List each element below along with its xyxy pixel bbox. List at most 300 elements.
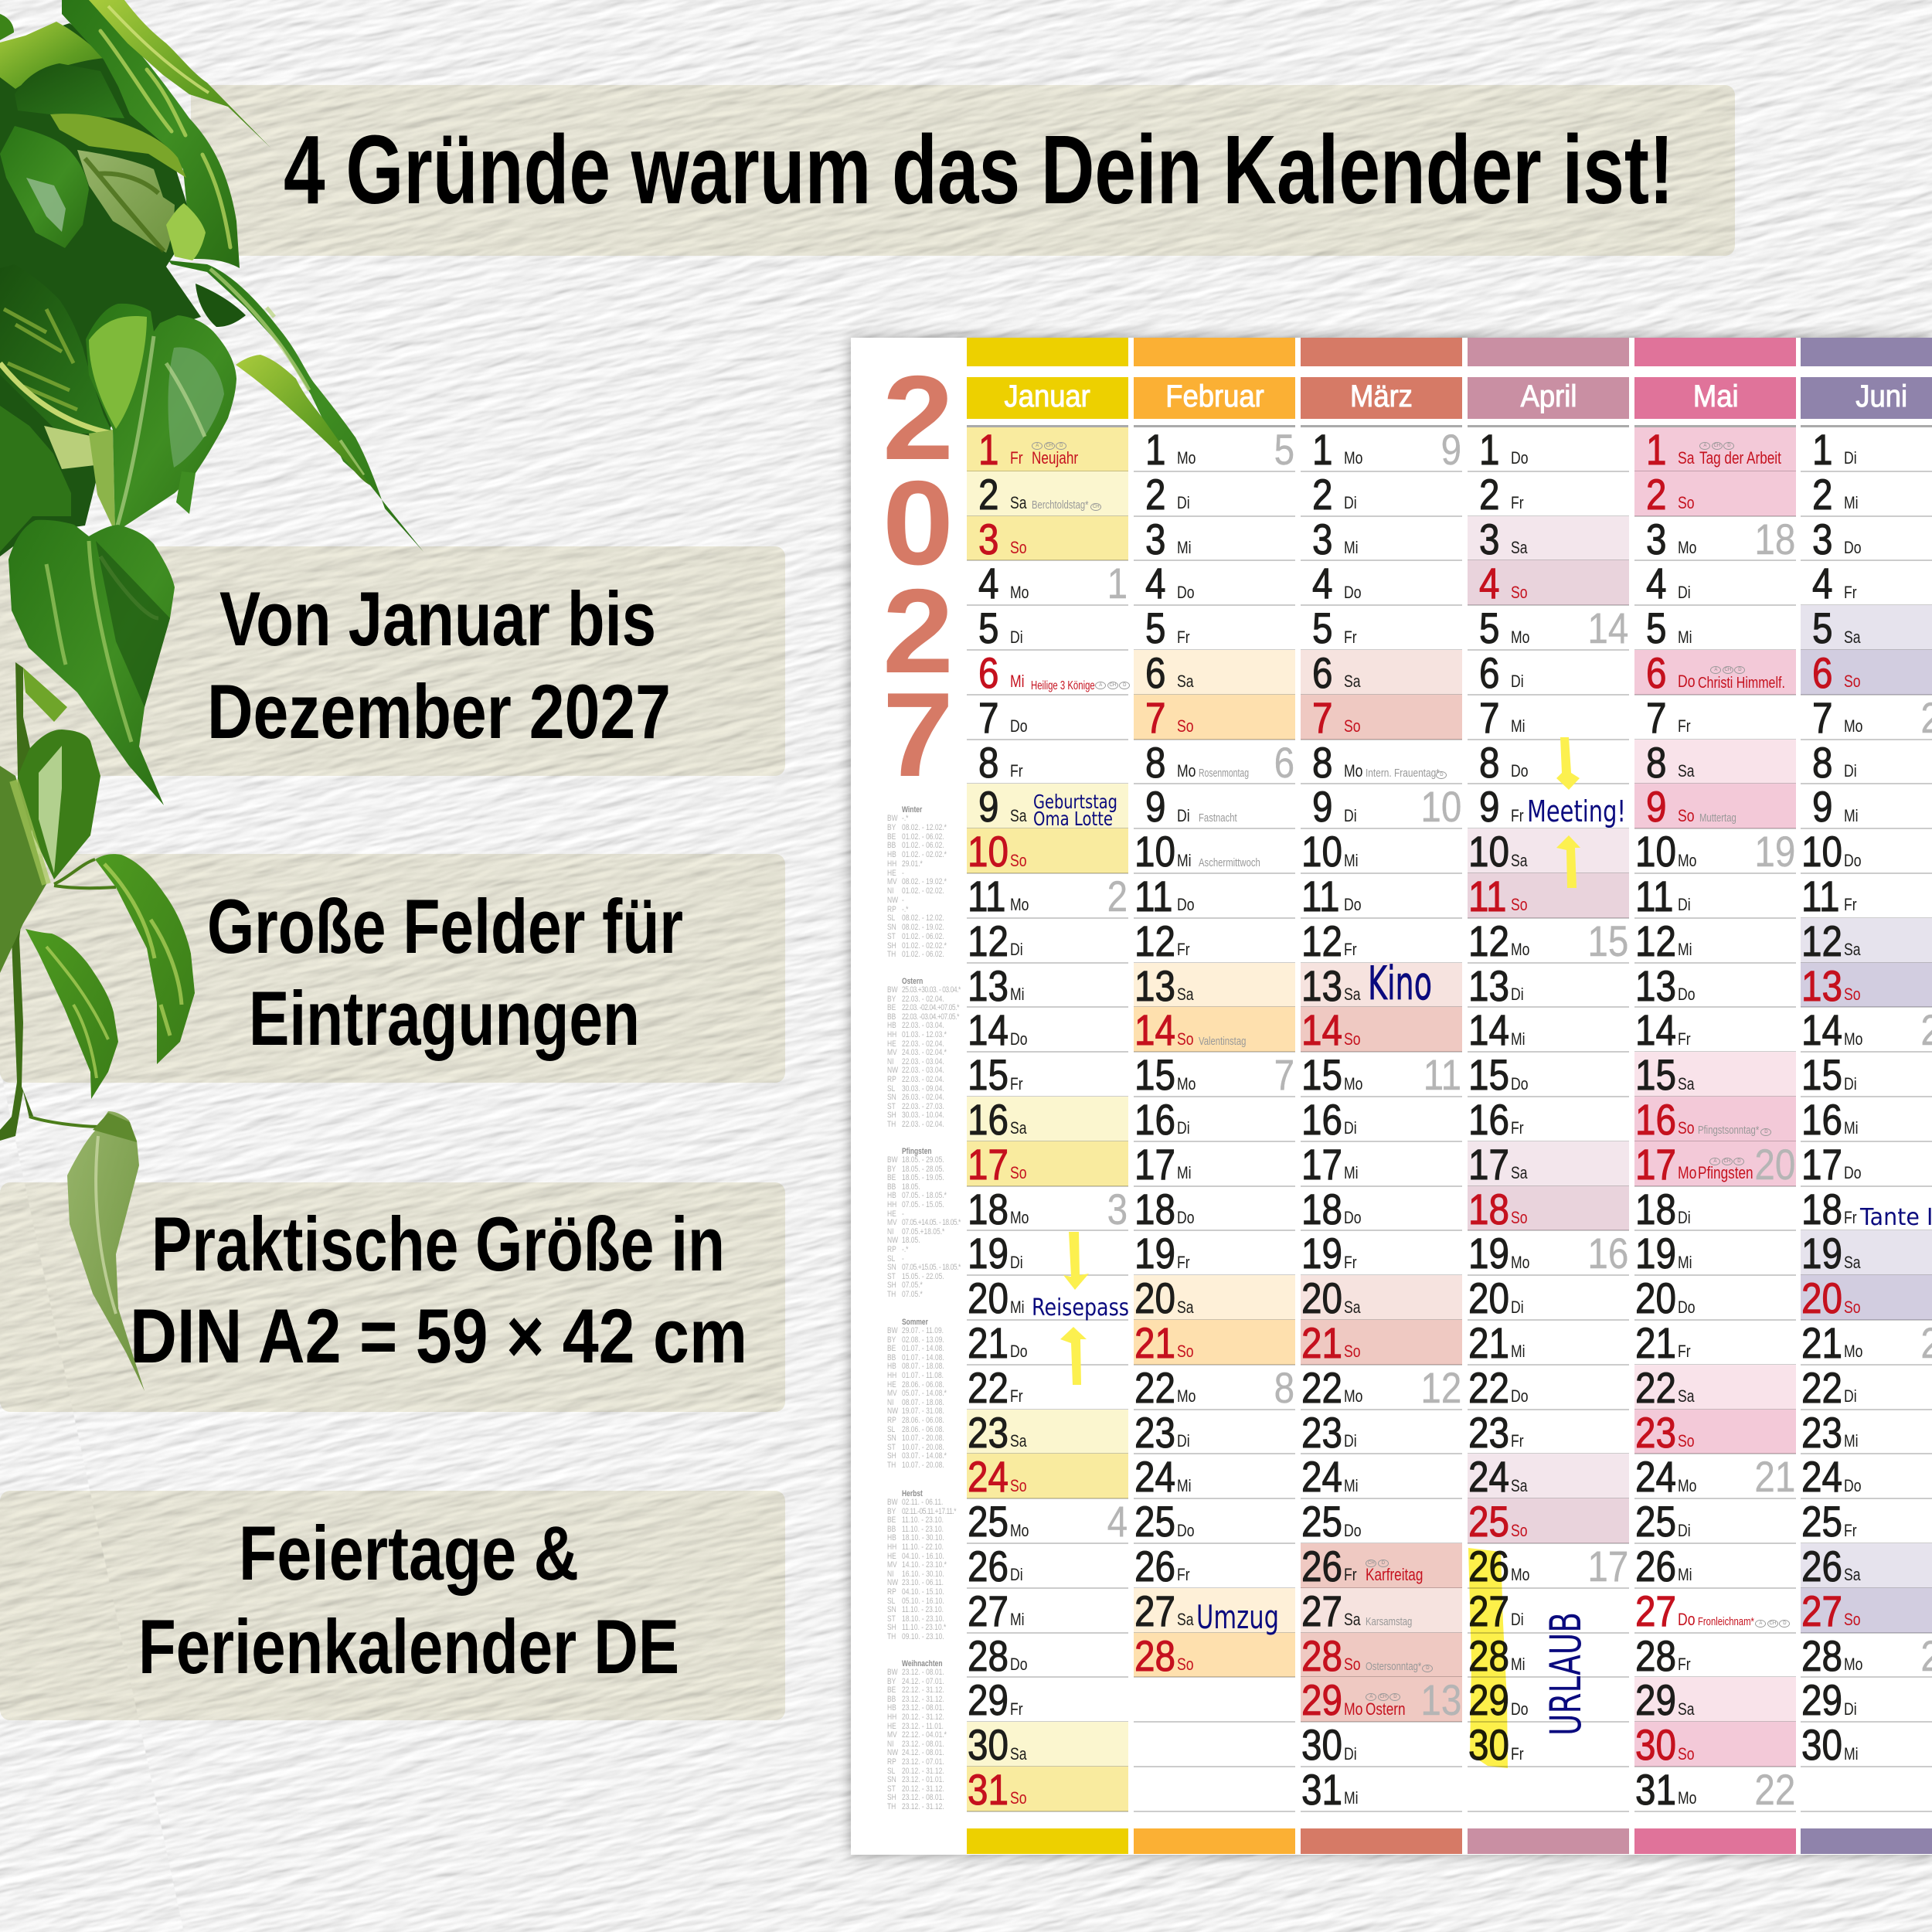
day rows März: Mo <box>1344 1074 1362 1094</box>
arrow: down to Reisepass <box>1063 1232 1089 1290</box>
day rows Mai: Do <box>1678 672 1695 691</box>
day rows Mai: 17 <box>1635 1140 1676 1189</box>
day rows Mai: D <box>1764 1130 1768 1134</box>
school holidays: Winter: - <box>902 869 904 878</box>
school holidays: Herbst: 02.11.-05.11.+17.11.* <box>902 1507 956 1516</box>
day rows März: 24 <box>1301 1452 1342 1501</box>
school holidays: Sommer: 01.07. - 14.08. <box>902 1353 944 1362</box>
school holidays: Winter: BW <box>887 814 898 823</box>
school holidays: Herbst: 11.10. - 23.10. <box>902 1515 944 1525</box>
school holidays: Herbst: 11.10. - 23.10. <box>902 1525 944 1534</box>
note: Kino: Kino <box>1368 957 1432 1011</box>
day rows April: So <box>1511 583 1527 602</box>
day rows Januar: 2 <box>1107 872 1128 920</box>
school holidays: Herbst: NI <box>887 1570 893 1579</box>
day rows Mai: Fr <box>1678 1029 1691 1049</box>
day rows März: So <box>1344 1655 1360 1674</box>
day rows März: Fr <box>1344 1253 1357 1272</box>
day rows Mai: Mi <box>1678 1253 1692 1272</box>
school holidays: Herbst: 05.10. - 16.10. <box>902 1597 944 1606</box>
day rows Mai: 9 <box>1646 782 1667 831</box>
school holidays: Ostern: 26.03. - 02.04. <box>902 1093 944 1102</box>
day rows März: 12 <box>1420 1363 1461 1412</box>
school holidays: Weihnachten: 23.12. - 08.01. <box>902 1793 944 1802</box>
day rows Januar: Di <box>1010 940 1022 959</box>
school holidays: Herbst <box>887 1489 957 1641</box>
plant: stem and lower hanging leaves <box>0 662 195 1391</box>
day rows Mai: So <box>1678 1431 1694 1451</box>
day rows Mai: 14 <box>1635 1005 1676 1054</box>
day rows Mai: CH <box>1770 1621 1776 1626</box>
note: Meeting!: Meeting! <box>1527 794 1626 828</box>
school holidays: Pfingsten: HB <box>887 1191 896 1200</box>
day rows April: 16 <box>1587 1229 1628 1277</box>
day rows Mai: 15 <box>1635 1050 1676 1099</box>
school holidays: Weihnachten: 23.12. - 01.01. <box>902 1775 944 1784</box>
day rows Mai: D <box>1727 444 1731 448</box>
school holidays: Herbst: HH <box>887 1543 896 1552</box>
arrow: up to Meeting <box>1556 835 1580 888</box>
day rows Januar: 6 <box>978 648 999 697</box>
day rows Juni <box>1801 427 1932 1811</box>
day rows April: Mi <box>1511 1342 1525 1361</box>
day rows März: 9 <box>1441 425 1461 474</box>
school holidays: Pfingsten: 07.05. - 15.05. <box>902 1200 944 1209</box>
school holidays: Winter: SL <box>887 913 895 923</box>
school holidays: Pfingsten: 18.05. <box>902 1236 920 1245</box>
day rows März: 9 <box>1312 782 1333 831</box>
school holidays: Ostern: NI <box>887 1057 893 1066</box>
day rows März: Sa <box>1344 672 1360 691</box>
school holidays: Pfingsten: Pfingsten <box>902 1147 932 1156</box>
day rows März: Mi <box>1344 538 1358 557</box>
day rows Januar: A <box>1036 444 1039 448</box>
day rows April: So <box>1511 895 1527 914</box>
day rows April: Di <box>1511 985 1524 1004</box>
day rows Februar: Mo <box>1177 448 1196 468</box>
day rows Juni: So <box>1844 985 1860 1004</box>
day rows Mai: D <box>1738 668 1742 672</box>
day rows Juni: 13 <box>1801 961 1842 1010</box>
day rows März: 31 <box>1301 1765 1342 1814</box>
day rows Februar: 7 <box>1145 693 1166 742</box>
day rows Mai: 23 <box>1635 1408 1676 1457</box>
day rows Januar: Neujahr <box>1032 448 1078 468</box>
day rows Juni: Di <box>1844 448 1857 468</box>
day rows Mai: 22 <box>1635 1363 1676 1412</box>
school holidays: Sommer: 28.06. - 06.08. <box>902 1416 944 1425</box>
day rows Mai: 5 <box>1646 604 1667 652</box>
day rows Mai: 20 <box>1754 1140 1795 1189</box>
day rows Juni: Do <box>1844 538 1861 557</box>
school holidays: Pfingsten: MV <box>887 1218 897 1227</box>
day rows Januar: 12 <box>968 917 1009 965</box>
day rows Juni: Di <box>1844 1074 1857 1094</box>
school holidays: Herbst: RP <box>887 1587 896 1597</box>
school holidays: Ostern: 22.03. -02.04.+07.05.* <box>902 1003 959 1012</box>
school holidays: Winter: 08.02. - 12.02. <box>902 913 944 923</box>
school holidays: Ostern: SL <box>887 1084 895 1094</box>
day rows Juni: 15 <box>1801 1050 1842 1099</box>
day rows Januar: 17 <box>968 1140 1009 1189</box>
day rows Januar: 2 <box>978 470 999 519</box>
school holidays: Herbst: 18.10. - 23.10. <box>902 1614 944 1624</box>
day rows April: So <box>1511 1521 1527 1540</box>
panel: reason 2 <box>0 854 785 1083</box>
day rows Januar: Heilige 3 Könige <box>1031 679 1095 692</box>
month header Januar <box>967 377 1128 419</box>
day rows März: 14 <box>1301 1005 1342 1054</box>
day rows Februar: So <box>1177 1342 1193 1361</box>
day rows April: Mi <box>1511 716 1525 736</box>
school holidays: Weihnachten: RP <box>887 1757 896 1767</box>
day rows Februar: 9 <box>1145 782 1166 831</box>
panel: reason 1 <box>0 546 785 776</box>
day rows Januar: CH <box>1109 683 1116 688</box>
day rows Februar: 1 <box>1145 425 1166 474</box>
day rows März: 5 <box>1312 604 1333 652</box>
day rows Februar: So <box>1177 1029 1193 1049</box>
day rows Januar: Di <box>1010 1565 1022 1584</box>
day rows April: So <box>1511 1208 1527 1227</box>
day rows Februar: 6 <box>1145 648 1166 697</box>
day rows Juni: 10 <box>1801 827 1842 876</box>
school holidays: Pfingsten: -.* <box>902 1245 908 1254</box>
day rows April: Fr <box>1511 1118 1524 1138</box>
day rows Mai: Sa <box>1678 1699 1694 1719</box>
day rows Mai: 7 <box>1646 693 1667 742</box>
school holidays: Ostern: BB <box>887 1012 896 1022</box>
school holidays: Winter: Winter <box>902 805 922 815</box>
school holidays: Sommer: BW <box>887 1326 898 1335</box>
day rows Mai: Mo <box>1678 1163 1696 1182</box>
day rows April: 5 <box>1479 604 1500 652</box>
day rows März: Sa <box>1344 985 1360 1004</box>
day rows April: 9 <box>1479 782 1500 831</box>
day rows Januar: So <box>1010 1163 1026 1182</box>
school holidays: Herbst: 11.10. - 23.10.* <box>902 1623 946 1632</box>
day rows März: Do <box>1344 1521 1361 1540</box>
school holidays: Ostern: SH <box>887 1111 896 1120</box>
school holidays: Pfingsten: 07.05.* <box>902 1290 923 1299</box>
day rows März: Mi <box>1344 1476 1358 1495</box>
day rows März: 16 <box>1301 1095 1342 1144</box>
school holidays: Weihnachten: 20.12. - 31.12. <box>902 1713 944 1722</box>
day rows Februar: Mi <box>1177 538 1191 557</box>
day rows März: 1 <box>1312 425 1333 474</box>
panel: reason 3 <box>0 1182 785 1412</box>
day rows April: 15 <box>1587 917 1628 965</box>
day rows Januar: 28 <box>968 1631 1009 1680</box>
day rows Juni: Mi <box>1844 493 1858 512</box>
day rows Februar: Valentinstag <box>1199 1036 1247 1048</box>
day rows März: 27 <box>1301 1587 1342 1635</box>
day rows April: Mo <box>1511 940 1529 959</box>
day rows März: Di <box>1344 493 1357 512</box>
day rows Januar: Di <box>1010 628 1022 647</box>
day rows Juni: 18 <box>1801 1185 1842 1233</box>
day rows Juni: 2 <box>1812 470 1833 519</box>
school holidays: Ostern: TH <box>887 1120 896 1129</box>
day rows Februar: Di <box>1177 1118 1190 1138</box>
school holidays: Ostern: ST <box>887 1102 896 1111</box>
day rows Januar: Do <box>1010 1029 1027 1049</box>
panel: reason 4 <box>0 1491 785 1720</box>
school holidays: Ostern <box>887 977 961 1129</box>
day rows Februar: 23 <box>1134 1408 1175 1457</box>
school holidays: Pfingsten: 07.05.+15.05. - 18.05.* <box>902 1263 961 1272</box>
day rows Juni: Do <box>1844 851 1861 870</box>
day rows April: 25 <box>1468 1497 1509 1546</box>
day rows Januar: 19 <box>968 1229 1009 1277</box>
school holidays: Pfingsten: 18.05. - 29.05. <box>902 1155 944 1165</box>
school holidays: Herbst: Herbst <box>902 1489 923 1498</box>
school holidays: Pfingsten: BY <box>887 1165 896 1174</box>
school holidays: Weihnachten: 23.12. - 11.01. <box>902 1722 944 1731</box>
day rows April: Sa <box>1511 1476 1527 1495</box>
school holidays: Sommer: BB <box>887 1353 896 1362</box>
day rows Januar: Mi <box>1010 985 1024 1004</box>
day rows Mai: CH <box>1725 668 1731 672</box>
day rows Februar: Fr <box>1177 1253 1190 1272</box>
day rows April: Do <box>1511 761 1528 781</box>
day rows Januar: 10 <box>968 827 1009 876</box>
school holidays: Herbst: 04.10. - 16.10. <box>902 1552 944 1561</box>
day rows Mai: Fronleichnam* <box>1698 1616 1754 1628</box>
day rows Februar: 18 <box>1134 1185 1175 1233</box>
day rows Juni: 3 <box>1812 515 1833 563</box>
day rows Mai: A <box>1703 444 1706 448</box>
school holidays: Winter: - <box>902 896 904 905</box>
day rows April: 22 <box>1468 1363 1509 1412</box>
day rows Mai: Fr <box>1678 1342 1691 1361</box>
day rows Januar: 18 <box>968 1185 1009 1233</box>
day rows Juni: Sa <box>1844 940 1860 959</box>
day rows Februar: 24 <box>1134 1452 1175 1501</box>
day rows Februar: 5 <box>1145 604 1166 652</box>
school holidays: Winter: NI <box>887 886 893 896</box>
school holidays: Sommer: 02.08. - 13.09. <box>902 1335 944 1345</box>
day rows Februar: 6 <box>1274 738 1294 787</box>
month header Mai <box>1634 377 1796 419</box>
school holidays: Herbst: ST <box>887 1614 896 1624</box>
day rows Februar: Sa <box>1177 1298 1193 1317</box>
day rows Juni: Mi <box>1844 806 1858 825</box>
day rows Februar: Mo <box>1177 761 1196 781</box>
day rows März: Intern. Frauentag* <box>1366 767 1440 780</box>
panel: month April <box>1468 338 1629 1854</box>
school holidays: Weihnachten: 24.12. - 08.01. <box>902 1748 944 1757</box>
day rows März: 13 <box>1301 961 1342 1010</box>
note: Reisepass: Reisepass <box>1032 1294 1129 1321</box>
day rows Mai: 21 <box>1754 1452 1795 1501</box>
day rows Januar: 15 <box>968 1050 1009 1099</box>
day rows Mai: So <box>1678 1118 1694 1138</box>
day rows Juni: 16 <box>1801 1095 1842 1144</box>
day rows Januar: 16 <box>968 1095 1009 1144</box>
day rows Mai: So <box>1678 806 1694 825</box>
school holidays: Herbst: HE <box>887 1552 896 1561</box>
school holidays: Pfingsten: TH <box>887 1290 896 1299</box>
day rows Mai: 26 <box>1635 1542 1676 1590</box>
panel: reason 4: Feiertage & <box>239 1510 579 1596</box>
day rows Januar: Mo <box>1010 1521 1029 1540</box>
text: 0 <box>883 456 954 590</box>
day rows Februar: 16 <box>1134 1095 1175 1144</box>
day rows Februar: 8 <box>1274 1363 1294 1412</box>
school holidays: Ostern: SN <box>887 1093 896 1102</box>
day rows Mai: 19 <box>1635 1229 1676 1277</box>
school holidays: Pfingsten: 15.05. - 22.05. <box>902 1272 944 1281</box>
day rows Februar: 28 <box>1134 1631 1175 1680</box>
day rows April: 30 <box>1468 1720 1509 1769</box>
day rows Juni: 22 <box>1801 1363 1842 1412</box>
day rows Februar: 7 <box>1274 1050 1294 1099</box>
day rows März: Mi <box>1344 1788 1358 1808</box>
panel: reason 3: Praktische Größe in <box>151 1201 725 1287</box>
school holidays: Weihnachten: 24.12. - 07.01. <box>902 1677 944 1686</box>
school holidays: Pfingsten: - <box>902 1254 904 1264</box>
day rows April: 19 <box>1468 1229 1509 1277</box>
day rows Mai: Mi <box>1678 1565 1692 1584</box>
day rows Mai: 31 <box>1635 1765 1676 1814</box>
day rows Juni: 11 <box>1801 872 1840 920</box>
day rows Juni: Mo <box>1844 1342 1862 1361</box>
school holidays: Pfingsten: BW <box>887 1155 898 1165</box>
school holidays: Weihnachten: 22.12. - 31.12. <box>902 1685 944 1695</box>
day rows April: 2 <box>1479 470 1500 519</box>
school holidays: Sommer: 10.07. - 20.08. <box>902 1443 944 1452</box>
day rows Januar: A <box>1099 683 1102 688</box>
school holidays: Weihnachten: BB <box>887 1695 896 1704</box>
day rows Mai: 8 <box>1646 738 1667 787</box>
day rows Mai: A <box>1759 1621 1762 1626</box>
day rows Januar: D <box>1123 683 1126 688</box>
day rows Januar: Do <box>1010 1655 1027 1674</box>
day rows Mai: Pfingsten <box>1698 1163 1753 1182</box>
school holidays: Herbst: TH <box>887 1632 896 1641</box>
day rows Januar: Fr <box>1010 1699 1022 1719</box>
day rows März: 15 <box>1301 1050 1342 1099</box>
day rows Januar: Sa <box>1010 1431 1026 1451</box>
text: 2 <box>883 351 954 485</box>
school holidays: Winter: 01.02. - 06.02. <box>902 932 944 941</box>
school holidays: Pfingsten: 18.05. - 28.05. <box>902 1165 944 1174</box>
day rows Mai: Sa <box>1678 448 1694 468</box>
day rows April: Fr <box>1511 1431 1524 1451</box>
day rows April: 23 <box>1468 1408 1509 1457</box>
school holidays: Ostern: 22.03. - 02.04. <box>902 1039 944 1049</box>
day rows Juni: Di <box>1844 1386 1857 1406</box>
school holidays: Pfingsten: ST <box>887 1272 896 1281</box>
day rows April: Do <box>1511 1386 1528 1406</box>
panel: reason 2: Große Felder für <box>207 883 683 969</box>
day rows Januar: 4 <box>1107 1497 1128 1546</box>
day rows Mai: 29 <box>1635 1675 1676 1724</box>
school holidays: Winter: HB <box>887 850 896 859</box>
school holidays: Winter: 08.02. - 19.02.* <box>902 877 947 886</box>
day rows Januar: Fr <box>1010 1386 1022 1406</box>
day rows Mai: 24 <box>1635 1452 1676 1501</box>
school holidays: Winter: TH <box>887 950 896 959</box>
day rows Juni: Mo <box>1844 716 1862 736</box>
day rows Februar: Sa <box>1177 672 1193 691</box>
day rows März: 19 <box>1301 1229 1342 1277</box>
school holidays: Ostern: HE <box>887 1039 896 1049</box>
day rows Januar: Do <box>1010 1342 1027 1361</box>
day rows Januar: CH <box>1046 444 1053 448</box>
day rows Juni: Mi <box>1844 1431 1858 1451</box>
day rows März: So <box>1344 716 1360 736</box>
day rows Mai: 18 <box>1754 515 1795 563</box>
day rows März: Mo <box>1344 1386 1362 1406</box>
day rows Januar: Mi <box>1010 672 1024 691</box>
school holidays: Sommer <box>887 1318 947 1470</box>
day rows März: 23 <box>1301 1408 1342 1457</box>
day rows Februar: Aschermittwoch <box>1199 857 1260 869</box>
day rows Januar: 8 <box>978 738 999 787</box>
day rows April: 11 <box>1468 872 1507 920</box>
day rows März: 12 <box>1301 917 1342 965</box>
day rows Juni: 5 <box>1812 604 1833 652</box>
day rows Mai: 12 <box>1635 917 1676 965</box>
school holidays: Weihnachten: 23.12. - 08.01. <box>902 1668 944 1677</box>
school holidays: Herbst: SN <box>887 1605 896 1614</box>
day rows April: 14 <box>1587 604 1628 652</box>
school holidays: Sommer: BE <box>887 1344 896 1353</box>
day rows April: Di <box>1511 672 1524 691</box>
day rows Mai: A <box>1714 668 1717 672</box>
school holidays: Ostern: 22.03. -03.04.+07.05.* <box>902 1012 959 1022</box>
day rows Juni: So <box>1844 672 1860 691</box>
day rows April: Fr <box>1511 1743 1524 1764</box>
day rows März: Mo <box>1344 1699 1362 1719</box>
panel: reason 1: Von Januar bis <box>219 576 656 662</box>
school holidays: Winter: 08.02. - 12.02.* <box>902 823 947 832</box>
day rows Januar: 11 <box>968 872 1006 920</box>
day rows Juni: 27 <box>1801 1587 1842 1635</box>
day rows Januar: So <box>1010 1476 1026 1495</box>
school holidays: Sommer: BY <box>887 1335 896 1345</box>
day rows Juni: 23 <box>1801 1408 1842 1457</box>
school holidays: Ostern: RP <box>887 1075 896 1084</box>
school holidays: Pfingsten: 07.05.+18.05.* <box>902 1227 944 1236</box>
day rows Februar: 10 <box>1134 827 1175 876</box>
day rows Mai: Sa <box>1678 761 1694 781</box>
school holidays: Weihnachten: 23.12. - 07.01. <box>902 1757 944 1767</box>
school holidays: Winter: 01.02. - 06.02. <box>902 841 944 850</box>
school holidays: Sommer: 08.07. - 18.08. <box>902 1362 944 1371</box>
school holidays: Weihnachten: 23.12. - 08.01. <box>902 1703 944 1713</box>
day rows April: 17 <box>1587 1542 1628 1590</box>
day rows März: 29 <box>1301 1675 1342 1724</box>
day rows Juni: 17 <box>1801 1140 1842 1189</box>
day rows April: 4 <box>1479 559 1500 607</box>
day rows Januar: D <box>1060 444 1063 448</box>
school holidays: Ostern: 30.03. - 09.04. <box>902 1084 944 1094</box>
day rows Januar: Berchtoldstag* <box>1032 499 1089 512</box>
school holidays: Weihnachten: NI <box>887 1740 893 1749</box>
day rows März: 13 <box>1420 1675 1461 1724</box>
school holidays: Weihnachten: SN <box>887 1775 896 1784</box>
school holidays: Weihnachten <box>887 1659 947 1811</box>
day rows Mai: Do <box>1678 1610 1695 1629</box>
day rows April: 16 <box>1468 1095 1509 1144</box>
day rows Januar: 1 <box>1107 559 1128 607</box>
day rows Juni: 29 <box>1801 1675 1842 1724</box>
day rows März: 11 <box>1301 872 1340 920</box>
day rows Februar: Fr <box>1177 1565 1190 1584</box>
